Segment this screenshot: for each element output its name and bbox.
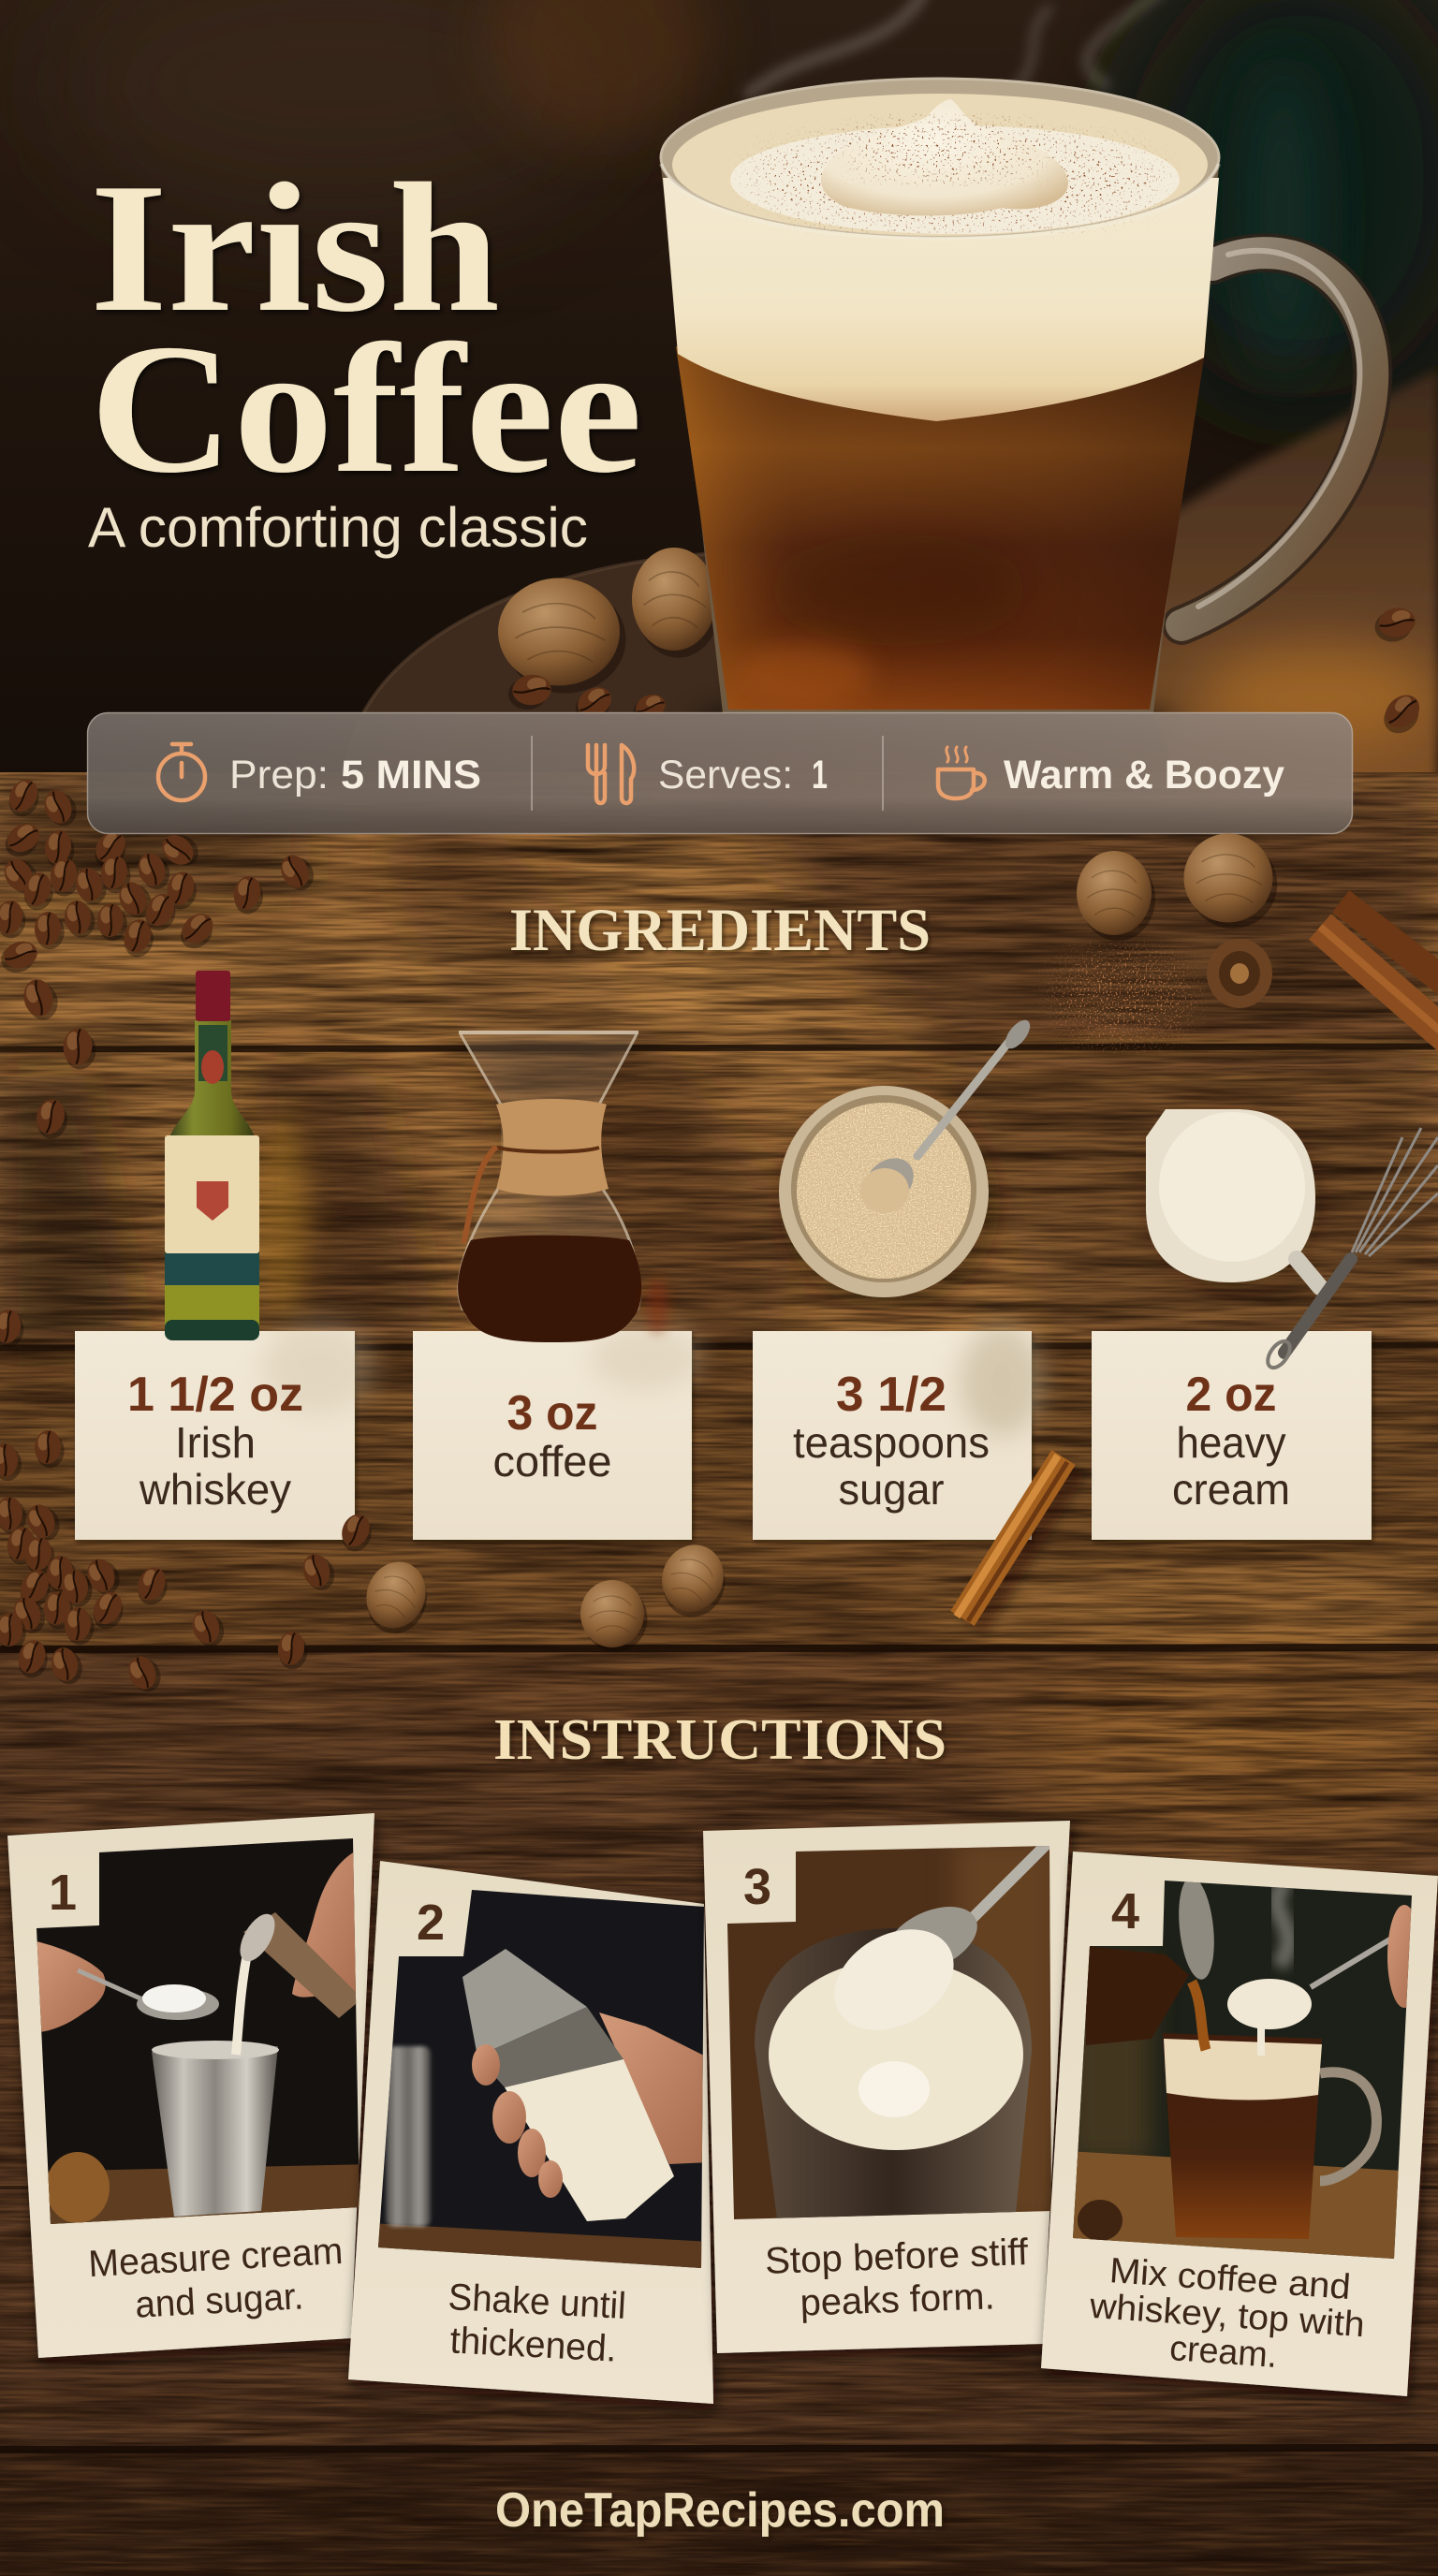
- card: coffee: 3 oz: [507, 1386, 597, 1441]
- background: round table edge and surface: [346, 370, 1438, 1002]
- glass rim: [661, 79, 1219, 236]
- card: sugar: sugar: [839, 1465, 944, 1514]
- step 1 caption: [87, 2231, 344, 2326]
- step card 3: stop before stiff peaks: [703, 1821, 1070, 2353]
- upper right nutmeg and cinnamon: [1053, 833, 1438, 1048]
- serves label: Serves:: [658, 753, 793, 798]
- lower scattered nutmegs: [356, 1536, 736, 1652]
- icon: steam above mug: [749, 0, 1161, 94]
- step 4 caption: [1088, 2251, 1366, 2376]
- background: lower dark wood planks: [0, 1638, 1438, 2576]
- foam top: [672, 94, 1208, 236]
- lower left coffee beans: [0, 1429, 378, 1696]
- ingredient: cream jug and whisk: [1146, 1109, 1438, 1371]
- card: cream: 2 oz: [1185, 1368, 1277, 1422]
- photo 3: [721, 1839, 1058, 2223]
- step 1 caption: Measure cream: [87, 2231, 344, 2285]
- icon: stopwatch: [158, 744, 205, 800]
- cream layer: [663, 178, 1219, 421]
- card: whiskey: 1 1/2 oz: [127, 1368, 303, 1422]
- card: coffee: coffee: [492, 1437, 612, 1486]
- info pill: time, servings and character: [87, 712, 1353, 834]
- cinnamon stick on cards: [957, 1456, 1073, 1628]
- step 4 caption: cream.: [1168, 2329, 1279, 2376]
- step card 4: mix and top: [1041, 1852, 1438, 2396]
- heading: ingredients: INGREDIENTS: [509, 897, 931, 964]
- background: upper wood planks: [0, 772, 1438, 1666]
- title: [90, 145, 642, 511]
- heading: instructions: INSTRUCTIONS: [493, 1708, 946, 1772]
- step 3 caption: [764, 2232, 1030, 2324]
- step 2 caption: [448, 2276, 627, 2370]
- ingredient cards: [75, 1320, 1372, 1540]
- ingredient: bowl of sugar: [779, 1016, 1034, 1310]
- step card 1: measure: [7, 1813, 374, 2358]
- photo 1: [37, 1838, 360, 2224]
- step number 4: 4: [1111, 1883, 1139, 1939]
- background: wood grain texture: [0, 772, 1438, 2576]
- step card 2: shake: [348, 1861, 713, 2404]
- serves label: 1: [812, 753, 828, 798]
- card: cream: cream: [1172, 1465, 1290, 1514]
- photo 4: [1067, 1872, 1421, 2265]
- hero image: Irish coffee mug: [660, 79, 1372, 745]
- step 3 caption: Stop before stiff: [764, 2232, 1030, 2282]
- title: Coffee: [90, 306, 642, 511]
- card: cream: [1092, 1331, 1372, 1540]
- title: Irish: [90, 145, 500, 350]
- icon: fork and knife: [588, 745, 634, 803]
- upper left coffee beans: [0, 774, 319, 1350]
- glass base: [660, 159, 1220, 713]
- mug handle: [1181, 251, 1372, 625]
- card: sugar: [753, 1325, 1044, 1540]
- card: coffee: [413, 1325, 702, 1540]
- card: cream: heavy: [1176, 1418, 1286, 1467]
- subtitle: A comforting classic: [88, 496, 588, 559]
- card: whiskey: Irish: [175, 1418, 256, 1467]
- prep label: Prep:: [229, 753, 329, 798]
- prep label: 5 MINS: [341, 753, 481, 798]
- photo 2: [370, 1881, 712, 2275]
- step 1 caption: and sugar.: [134, 2276, 304, 2326]
- footer website: OneTapRecipes.com: [495, 2483, 945, 2538]
- hero image: nutmegs and beans on the board: [498, 548, 1429, 740]
- card: sugar: 3 1/2: [836, 1368, 946, 1422]
- background: hero dark backdrop: [0, 0, 1438, 786]
- card: whiskey: [75, 1320, 374, 1540]
- step 3 caption: peaks form.: [800, 2276, 995, 2324]
- warm and boozy label: Warm & Boozy: [1004, 753, 1284, 798]
- step number 1: 1: [49, 1865, 77, 1921]
- step 4 caption: whiskey, top with: [1088, 2287, 1366, 2345]
- icon: steaming cup: [938, 747, 985, 798]
- step 2 caption: Shake until: [448, 2276, 627, 2327]
- ingredient: whiskey bottle: [165, 971, 309, 1340]
- coffee layer: [676, 346, 1206, 710]
- prep label: [229, 753, 481, 798]
- ingredient: chemex coffee carafe: [458, 1032, 668, 1342]
- card: sugar: teaspoons: [793, 1418, 990, 1467]
- card: whiskey: whiskey: [139, 1465, 291, 1514]
- step 4 caption: Mix coffee and: [1108, 2251, 1352, 2307]
- step 2 caption: thickened.: [449, 2320, 618, 2370]
- front rim highlight: [661, 164, 1219, 239]
- step number 3: 3: [743, 1859, 771, 1915]
- step number 2: 2: [417, 1895, 445, 1951]
